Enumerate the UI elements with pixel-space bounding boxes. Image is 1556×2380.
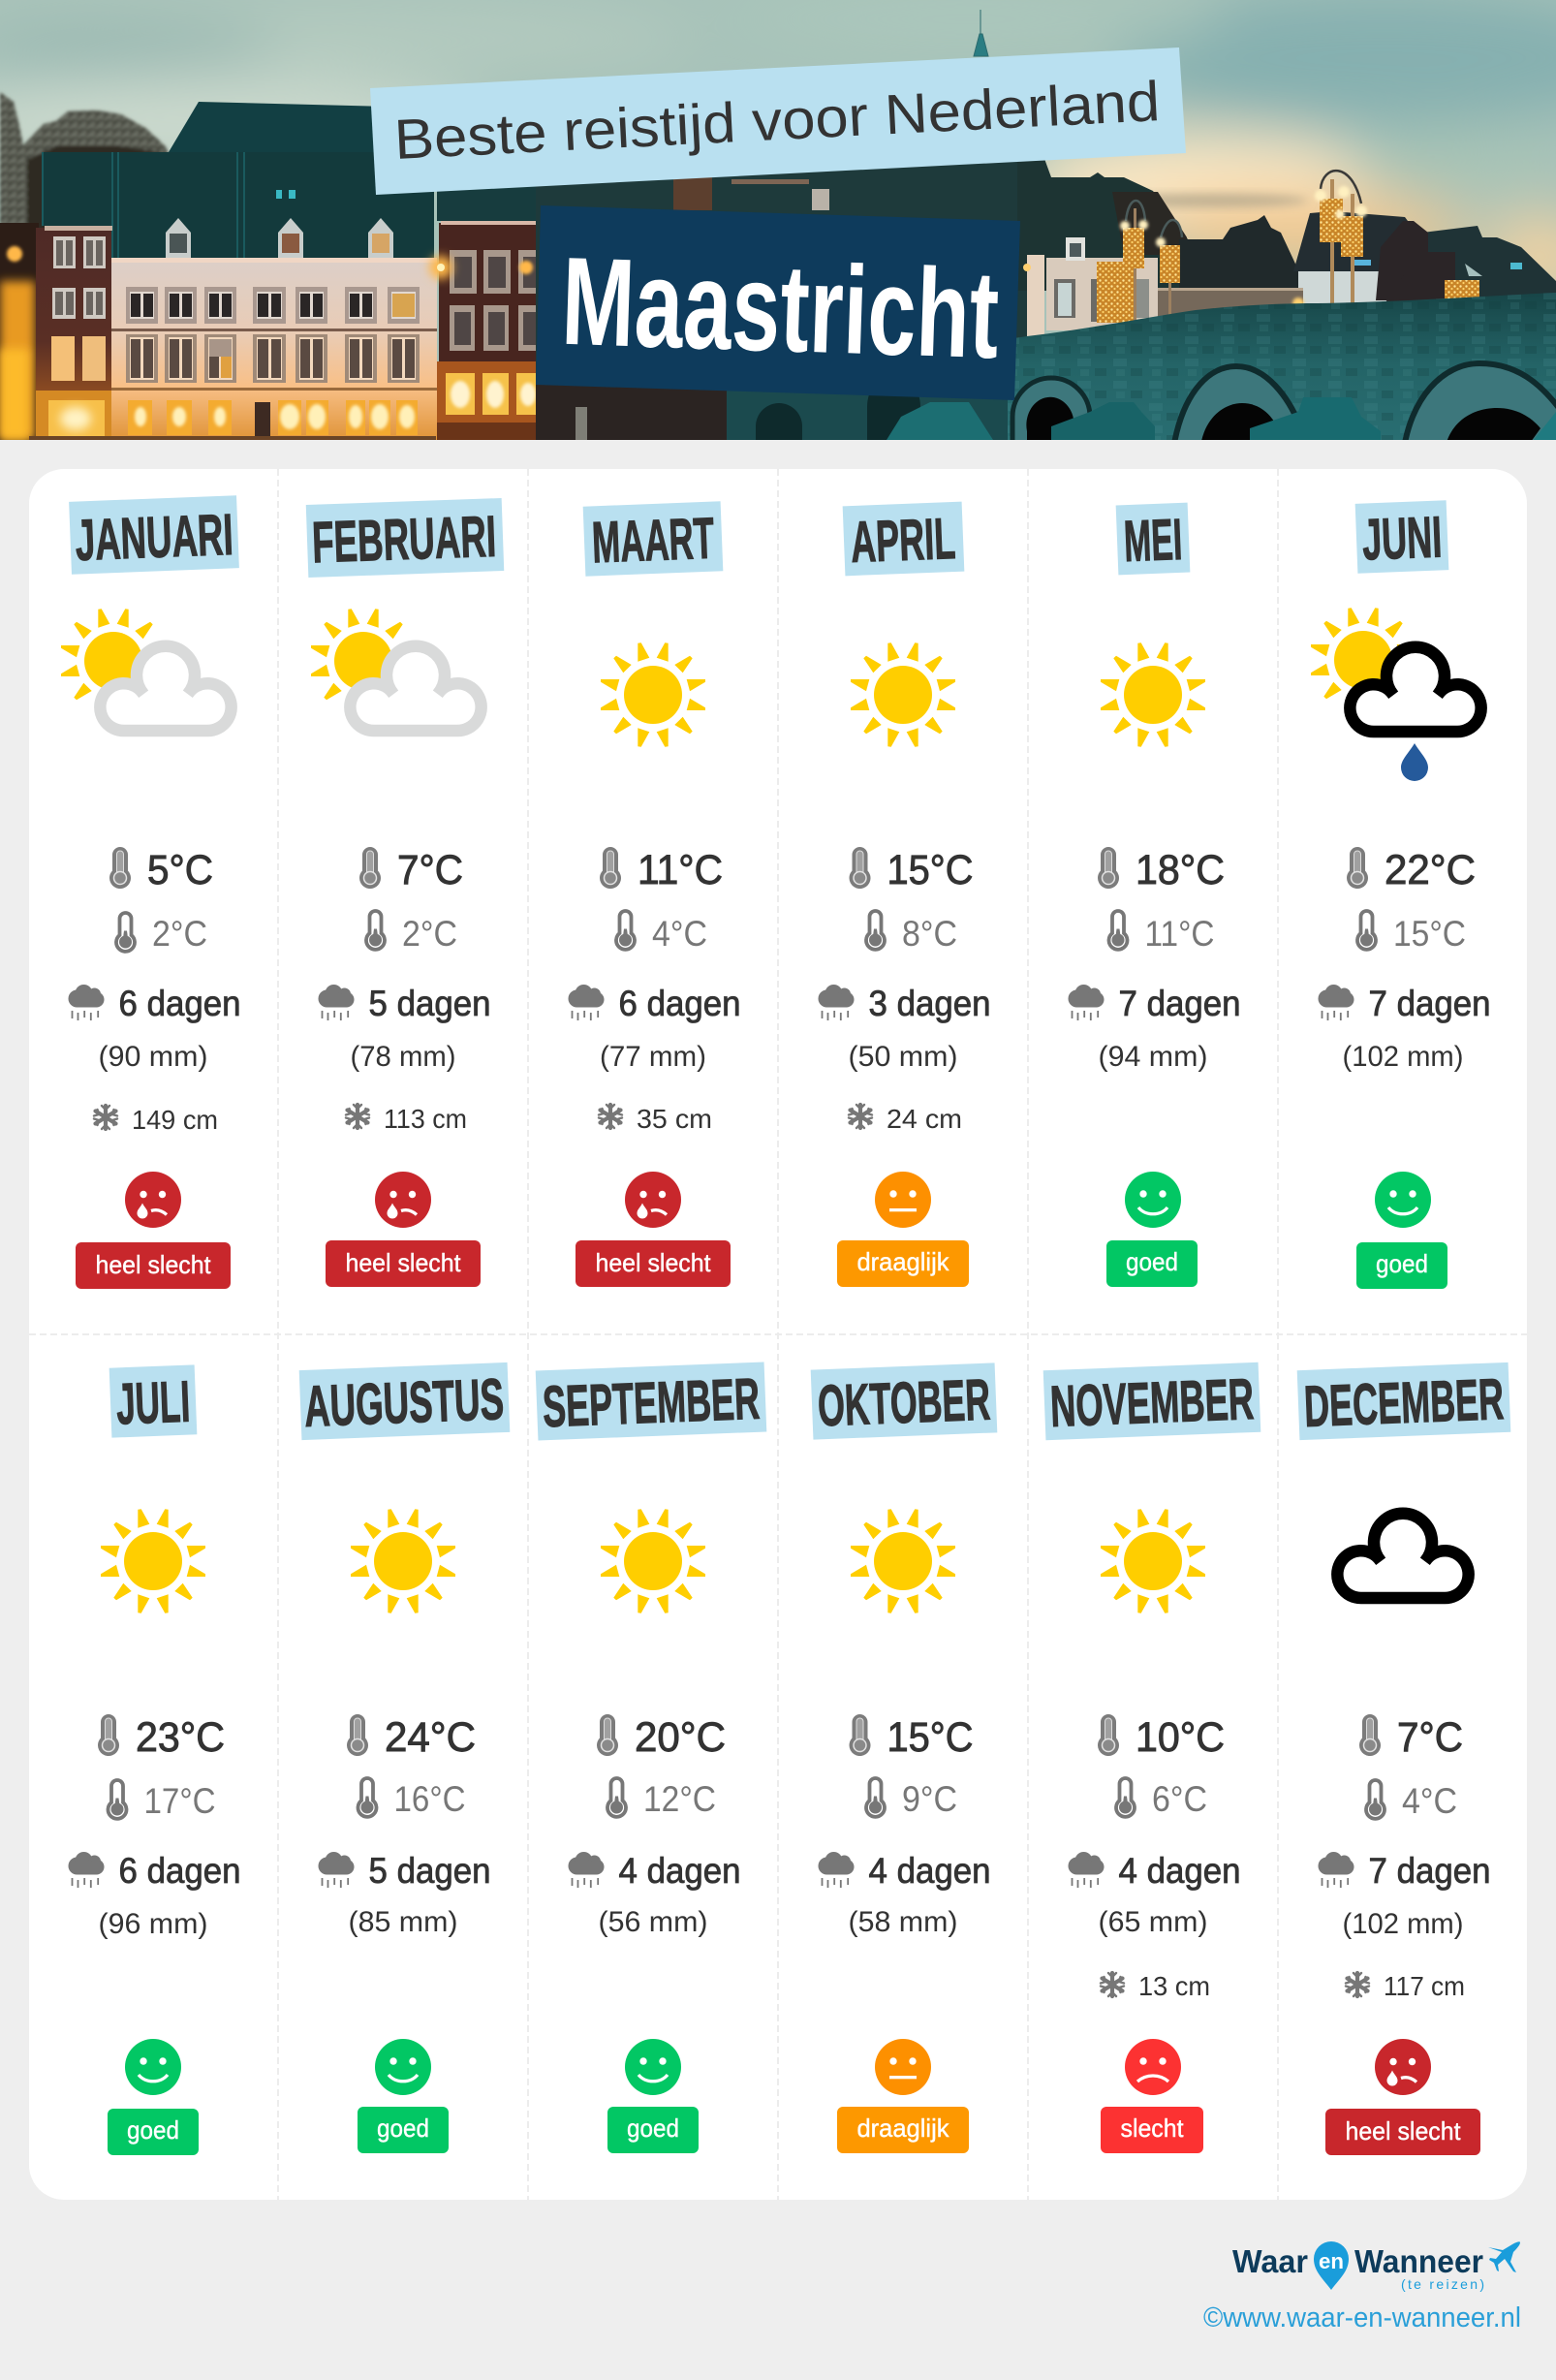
rating face xyxy=(375,1172,431,1228)
high temperature: 11°C xyxy=(638,847,723,893)
pale facades behind lamps xyxy=(1027,255,1044,337)
icon: map pin xyxy=(1314,2241,1349,2290)
month label: augustus: AUGUSTUS xyxy=(303,1366,505,1439)
rain days: 6 dagen xyxy=(118,984,240,1023)
high temperature: 15°C xyxy=(887,847,973,893)
panel: maart xyxy=(568,501,740,1287)
logo: Waar en Wanneer: Waar xyxy=(1232,2243,1308,2279)
rain days xyxy=(1318,984,1490,1023)
rain days: 7 dagen xyxy=(1368,1851,1490,1891)
low temperature xyxy=(866,1778,957,1819)
rating badge: heel slecht xyxy=(1345,2116,1461,2145)
low temperature xyxy=(616,911,707,954)
panel: juli xyxy=(68,1364,240,2155)
month label: mei xyxy=(1116,503,1190,575)
rain days xyxy=(1068,1851,1240,1891)
facade windows upper row xyxy=(126,287,420,324)
high temperature xyxy=(597,1714,726,1761)
high temperature xyxy=(1098,847,1225,893)
panel: juni xyxy=(1311,500,1490,1289)
rating badge xyxy=(1106,1240,1198,1287)
high temperature xyxy=(1359,1714,1463,1761)
right skyline roofs xyxy=(1031,161,1188,291)
street lights right xyxy=(1023,171,1479,325)
icon: sun xyxy=(851,1509,955,1613)
panel: augustus xyxy=(299,1362,510,2153)
high temperature xyxy=(600,847,723,893)
central roofs xyxy=(536,162,1027,384)
rating face xyxy=(875,1172,931,1228)
rain days: 3 dagen xyxy=(868,984,990,1023)
street lamp glows left xyxy=(429,256,452,279)
rain days xyxy=(1318,1851,1490,1891)
high temperature: 18°C xyxy=(1136,847,1225,893)
icon: sun xyxy=(601,642,705,747)
rating badge: draaglijk xyxy=(856,2114,949,2143)
month label: november: NOVEMBER xyxy=(1049,1366,1255,1439)
rainfall: (58 mm) xyxy=(849,1906,957,1938)
rating badge xyxy=(1325,2109,1480,2155)
rating badge xyxy=(1356,1242,1447,1289)
low temperature: 6°C xyxy=(1152,1779,1207,1819)
logo: Waar en Wanneer: en xyxy=(1319,2249,1344,2273)
snowfall xyxy=(1101,1971,1210,2001)
rain days: 7 dagen xyxy=(1368,984,1490,1023)
month label: maart xyxy=(583,501,723,577)
ground floor lights xyxy=(128,400,418,435)
rain days xyxy=(568,984,740,1023)
rating badge: goed xyxy=(1376,1249,1428,1278)
high temperature: 7°C xyxy=(1397,1714,1463,1761)
month label: januari: JANUARI xyxy=(74,502,234,573)
month label: februari xyxy=(306,498,504,578)
month label: oktober xyxy=(811,1362,997,1440)
rating badge: goed xyxy=(127,2115,179,2145)
month label: juli: JULI xyxy=(115,1369,191,1436)
rating face xyxy=(125,2039,181,2095)
rating badge: goed xyxy=(627,2114,679,2143)
white card xyxy=(29,469,1527,2200)
month label: april xyxy=(843,502,964,576)
snowfall: 24 cm xyxy=(887,1104,962,1134)
bridge arches xyxy=(1010,360,1556,440)
rating badge: heel slecht xyxy=(95,1250,211,1279)
month label: januari xyxy=(69,495,239,575)
month label: juni: JUNI xyxy=(1361,504,1443,573)
month label: mei: MEI xyxy=(1123,507,1183,574)
rain days xyxy=(68,984,240,1023)
rating face xyxy=(1125,1172,1181,1228)
rainfall: (85 mm) xyxy=(349,1906,457,1938)
low temperature: 17°C xyxy=(143,1781,215,1821)
rating badge: heel slecht xyxy=(345,1248,461,1277)
facade windows lower row xyxy=(126,334,420,383)
rainfall: (96 mm) xyxy=(99,1908,207,1940)
high temperature: 7°C xyxy=(397,847,463,893)
rating face xyxy=(1125,2039,1181,2095)
low temperature xyxy=(366,911,457,954)
spire xyxy=(974,10,988,56)
low temperature xyxy=(109,1780,215,1821)
icon: sun xyxy=(1101,1509,1205,1613)
rain days: 6 dagen xyxy=(118,1851,240,1891)
rating badge xyxy=(837,1240,969,1287)
panel: september xyxy=(536,1362,766,2153)
rating face xyxy=(625,1172,681,1228)
high temperature: 10°C xyxy=(1136,1714,1225,1761)
rainfall: (77 mm) xyxy=(600,1041,706,1073)
rainfall: (94 mm) xyxy=(1099,1041,1207,1073)
low temperature xyxy=(116,913,207,954)
rating badge xyxy=(576,1240,731,1287)
icon: black cloud xyxy=(1337,1514,1469,1598)
snowfall: 35 cm xyxy=(637,1104,712,1134)
low temperature: 12°C xyxy=(643,1779,716,1819)
rainfall: (56 mm) xyxy=(599,1906,707,1938)
header photo: Maastricht at dusk xyxy=(0,0,1556,455)
panel: december xyxy=(1297,1362,1510,2155)
month label: april: APRIL xyxy=(850,506,956,575)
low temperature xyxy=(607,1778,716,1819)
low temperature: 4°C xyxy=(1402,1781,1457,1821)
rating badge xyxy=(76,1242,231,1289)
snowfall: 117 cm xyxy=(1384,1971,1465,2001)
low temperature: 9°C xyxy=(902,1779,957,1819)
month label: november xyxy=(1043,1362,1260,1440)
logo: Waar en Wanneer: Wanneer xyxy=(1354,2243,1483,2279)
rain days: 5 dagen xyxy=(368,984,490,1023)
icon: sun, black cloud and rain drop xyxy=(1311,608,1481,781)
low temperature: 15°C xyxy=(1393,914,1466,954)
rating badge: draaglijk xyxy=(856,1247,949,1276)
low temperature: 2°C xyxy=(152,914,207,954)
panel: november xyxy=(1043,1362,1260,2153)
bridge piers xyxy=(1051,402,1155,440)
panel: februari xyxy=(306,498,504,1287)
snowfall xyxy=(1346,1971,1465,2001)
bridge xyxy=(1008,293,1556,455)
rain days xyxy=(318,984,490,1023)
high roof and main roof xyxy=(169,102,374,152)
rainfall: (50 mm) xyxy=(849,1041,957,1073)
low temperature: 11°C xyxy=(1145,914,1215,954)
icon: sun xyxy=(851,642,955,747)
low temperature xyxy=(866,911,957,954)
icon: airplane xyxy=(1488,2241,1520,2272)
rain days xyxy=(818,984,990,1023)
rating badge xyxy=(358,2107,449,2153)
high temperature xyxy=(347,1714,476,1761)
rating badge xyxy=(607,2107,699,2153)
rainfall: (65 mm) xyxy=(1099,1906,1207,1938)
snowfall: 13 cm xyxy=(1138,1971,1210,2001)
rating badge: heel slecht xyxy=(595,1248,711,1277)
high temperature xyxy=(359,847,463,893)
high temperature xyxy=(98,1714,225,1761)
rating badge xyxy=(326,1240,481,1287)
high temperature xyxy=(109,847,213,893)
icon: sun behind grey cloud xyxy=(61,609,232,731)
rainfall: (102 mm) xyxy=(1343,1041,1463,1073)
month label: maart: MAART xyxy=(591,506,715,575)
snowfall xyxy=(849,1104,962,1134)
left glow xyxy=(0,281,35,440)
high temperature xyxy=(1347,847,1476,893)
high temperature xyxy=(1098,1714,1225,1761)
month label: oktober: OKTOBER xyxy=(817,1367,991,1438)
icon: sun xyxy=(601,1509,705,1613)
rating badge xyxy=(1101,2107,1203,2153)
rain days: 6 dagen xyxy=(618,984,740,1023)
panel: januari xyxy=(61,495,240,1289)
left trees xyxy=(0,92,174,233)
logo: Waar en Wanneer xyxy=(1232,2241,1520,2292)
month label: februari: FEBRUARI xyxy=(311,504,497,575)
high temperature xyxy=(849,1714,973,1761)
rain days xyxy=(318,1851,490,1891)
low temperature: 16°C xyxy=(393,1779,465,1819)
month label: augustus xyxy=(299,1362,510,1440)
snowfall xyxy=(599,1104,712,1134)
rain days: 4 dagen xyxy=(868,1851,990,1891)
snowfall xyxy=(346,1104,467,1134)
high temperature: 23°C xyxy=(136,1714,225,1761)
rating face xyxy=(125,1172,181,1228)
rain days xyxy=(68,1851,240,1891)
high temperature: 22°C xyxy=(1385,847,1476,893)
rating badge: slecht xyxy=(1120,2114,1184,2143)
title banner: Beste reistijd voor Nederland xyxy=(392,70,1162,172)
low temperature: 4°C xyxy=(652,914,707,954)
rating face xyxy=(1375,2039,1431,2095)
low temperature: 8°C xyxy=(902,914,957,954)
rain days xyxy=(818,1851,990,1891)
rainfall: (78 mm) xyxy=(351,1041,455,1073)
logo: Waar en Wanneer: (te reizen) xyxy=(1401,2276,1484,2292)
snowfall: 113 cm xyxy=(384,1104,467,1134)
rain days: 7 dagen xyxy=(1118,984,1240,1023)
white facade xyxy=(111,260,437,440)
high temperature: 24°C xyxy=(385,1714,476,1761)
month label: september: SEPTEMBER xyxy=(542,1366,761,1439)
low temperature xyxy=(1366,1780,1457,1821)
website credit: ©www.waar-en-wanneer.nl xyxy=(1203,2302,1521,2333)
high temperature: 5°C xyxy=(147,847,213,893)
right brick house xyxy=(439,223,545,361)
city name banner: Maastricht xyxy=(560,232,1001,385)
low temperature: 2°C xyxy=(402,914,457,954)
month label: juli xyxy=(109,1364,197,1438)
rating face xyxy=(375,2039,431,2095)
low temperature xyxy=(358,1778,465,1819)
snowfall xyxy=(94,1105,218,1135)
low temperature xyxy=(1116,1778,1207,1819)
city name banner xyxy=(536,205,1020,400)
rain days: 5 dagen xyxy=(368,1851,490,1891)
month label: september xyxy=(536,1362,766,1441)
icon: sun xyxy=(101,1509,205,1613)
panel: mei xyxy=(1068,503,1240,1287)
rating badge: goed xyxy=(1126,1247,1178,1276)
dormers xyxy=(166,218,191,258)
rating face xyxy=(1375,1172,1431,1228)
rainfall: (102 mm) xyxy=(1343,1908,1463,1940)
rainfall: (90 mm) xyxy=(99,1041,207,1073)
high temperature: 15°C xyxy=(887,1714,973,1761)
rain days: 4 dagen xyxy=(1118,1851,1240,1891)
icon: sun xyxy=(1101,642,1205,747)
low temperature xyxy=(1357,911,1466,954)
panel: april xyxy=(818,502,990,1287)
month label: juni xyxy=(1355,500,1448,574)
rating face xyxy=(625,2039,681,2095)
rating badge: goed xyxy=(377,2114,429,2143)
panel: oktober xyxy=(811,1362,997,2153)
high temperature xyxy=(849,847,973,893)
rating face xyxy=(875,2039,931,2095)
rating badge xyxy=(837,2107,969,2153)
low temperature xyxy=(1108,911,1215,954)
rain days: 4 dagen xyxy=(618,1851,740,1891)
snowfall: 149 cm xyxy=(132,1105,218,1135)
title banner xyxy=(370,47,1186,195)
icon: sun behind grey cloud xyxy=(311,609,482,731)
rain days xyxy=(568,1851,740,1891)
rating badge xyxy=(108,2109,199,2155)
under navy block xyxy=(536,385,727,440)
left brick house xyxy=(36,228,111,391)
high temperature: 20°C xyxy=(635,1714,726,1761)
icon: sun xyxy=(351,1509,455,1613)
rain days xyxy=(1068,984,1240,1023)
